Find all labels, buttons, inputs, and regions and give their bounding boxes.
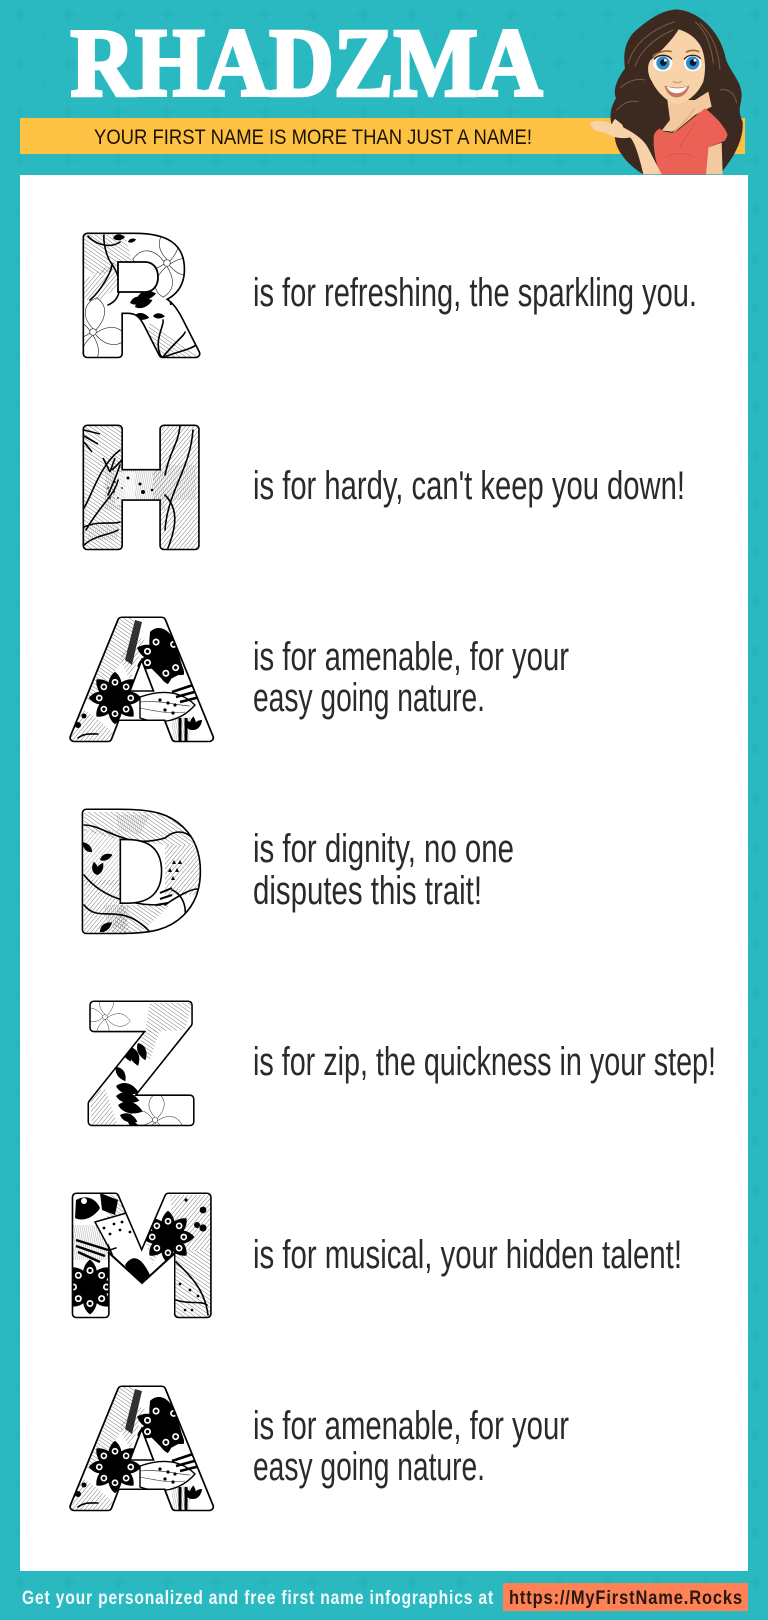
letter A: A	[73, 590, 210, 776]
row: M	[72, 1192, 680, 1318]
text: A second	[253, 1404, 569, 1489]
footer text: Get your personalized and free first name infographics at	[22, 1588, 494, 1609]
text: A: easy going nature.	[253, 676, 485, 720]
letter H: H	[72, 398, 210, 584]
letter R: R	[72, 206, 199, 392]
text: D: is for dignity, no one	[253, 827, 514, 871]
letter D: D	[72, 781, 205, 968]
row: A	[69, 616, 569, 742]
text: A	[253, 635, 569, 720]
illustration: woman	[590, 9, 743, 174]
text: D: disputes this trait!	[253, 869, 482, 913]
row: R	[82, 232, 694, 358]
text: D	[253, 827, 514, 913]
letter A second: A	[73, 1359, 210, 1545]
row: A second	[69, 1386, 569, 1512]
V notch of M	[108, 1252, 176, 1322]
text: A second: is for amenable, for your	[253, 1404, 569, 1448]
footer link	[503, 1583, 748, 1611]
text: A second: easy going nature.	[253, 1445, 485, 1489]
letter Z: Z	[85, 974, 197, 1160]
title: RHADZMA	[70, 10, 543, 118]
row: Z	[88, 1000, 714, 1126]
banner	[20, 118, 745, 154]
text: A: is for amenable, for your	[253, 635, 569, 679]
letter M: M	[62, 1165, 222, 1352]
counter of R	[118, 262, 158, 292]
row: H	[82, 424, 682, 550]
row: D	[82, 808, 513, 934]
tagline: YOUR FIRST NAME IS MORE THAN JUST A NAME!	[94, 126, 532, 149]
